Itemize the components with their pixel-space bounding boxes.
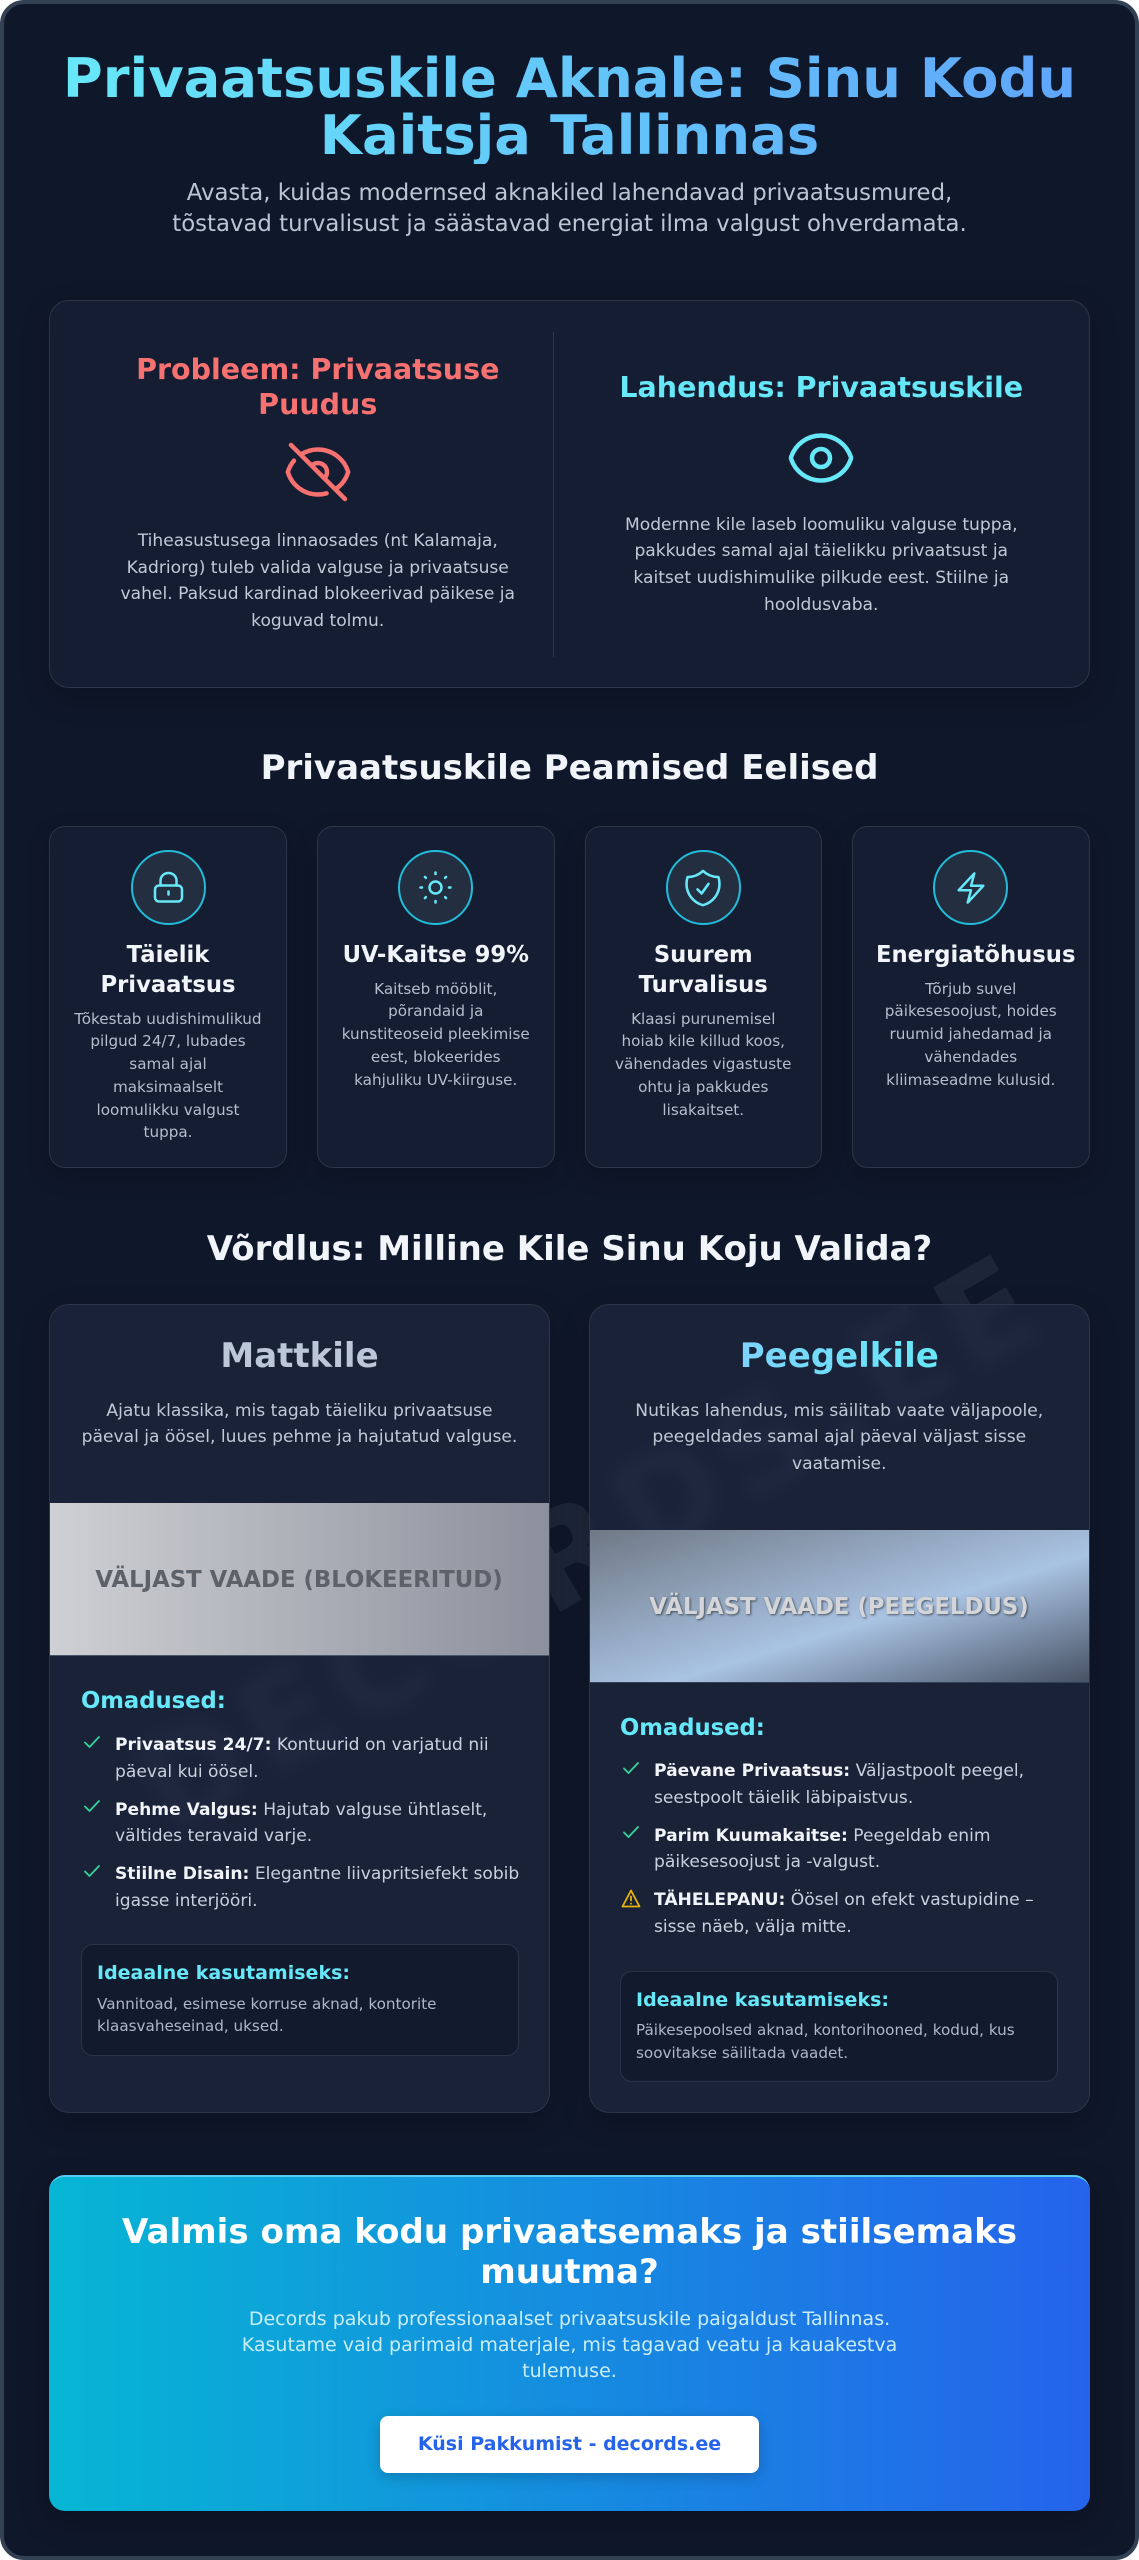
call to action text: Decords pakub professionaalset privaatsuskile paigaldust Tallinnas. (249, 2308, 890, 2330)
icon: eye (788, 433, 854, 483)
card title: safety: Suurem (654, 942, 753, 968)
icon: lightning bolt (933, 850, 1008, 925)
card title: energy: Energiatõhusus (876, 942, 1075, 968)
solution text: pakkudes samal ajal täielikku privaatsust ja (634, 541, 1008, 561)
mirror property 1: seestpoolt täielik läbipaistvus. (654, 1788, 913, 1808)
card text: energy: kliimaseadme kulusid. (886, 1071, 1055, 1089)
card title: UV: UV-Kaitse 99% (343, 942, 529, 968)
benefit card: energy (852, 826, 1090, 1168)
matte view illustration (50, 1503, 548, 1655)
panel: matte film (49, 1304, 550, 2113)
mirror description: vaatamise. (792, 1454, 886, 1474)
card title: safety: Turvalisus (639, 972, 768, 998)
matte property 3: Stiilne Disain: Elegantne liivapritsiefekt sobib (115, 1864, 519, 1884)
solution heading: Lahendus: Privaatsuskile (619, 370, 1023, 404)
mirror property 3: warning: TÄHELEPANU: Öösel on efekt vastupidine – (654, 1890, 1034, 1910)
card text: safety: hoiab kile killud koos, (622, 1032, 785, 1050)
card title: privacy: Täielik (127, 942, 209, 968)
card text: privacy: Tõkestab uudishimulikud (74, 1010, 262, 1028)
mirror property 2: päikesesoojust ja -valgust. (654, 1852, 880, 1872)
title (60, 50, 1080, 164)
matte description: Ajatu klassika, mis tagab täieliku privaatsuse (106, 1400, 493, 1420)
card title: privacy (100, 942, 236, 998)
call to action heading (122, 2212, 1017, 2292)
card text: safety: ohtu ja pakkudes (638, 1078, 768, 1096)
card text: privacy: maksimaalselt (113, 1078, 223, 1096)
benefit card: UV (317, 826, 554, 1168)
mirror description: peegeldades samal ajal päeval väljast sisse (652, 1427, 1026, 1447)
card text: safety: vähendades vigastuste (615, 1055, 791, 1073)
call to action text (242, 2308, 897, 2382)
card text: energy: päikesesoojust, hoides (885, 1002, 1057, 1020)
call to action heading: muutma? (480, 2252, 659, 2292)
matte property 1: päeval kui öösel. (115, 1762, 259, 1782)
solution text: hooldusvaba. (764, 595, 878, 615)
matte ideal use box: Vannitoad, esimese korruse aknad, kontorite (97, 1995, 437, 2013)
benefit card: safety (584, 826, 822, 1168)
problem text: koguvad tolmu. (251, 611, 384, 631)
problem text (121, 531, 515, 631)
title: Privaatsuskile Aknale: Sinu Kodu (63, 47, 1076, 110)
mirror ideal use box: soovitakse säilitada vaadet. (636, 2044, 848, 2062)
matte properties heading: Omadused: (81, 1688, 226, 1714)
card text: UV: kunstiteoseid pleekimise (342, 1025, 530, 1043)
matte property 2: vältides teravaid varje. (115, 1826, 312, 1846)
mirror description (635, 1400, 1043, 1474)
benefit card: privacy (49, 826, 286, 1168)
panel: mirror film (589, 1304, 1090, 2113)
mirror title: Peegelkile (740, 1336, 939, 1376)
matte ideal use box: klaasvaheseinad, uksed. (97, 2017, 284, 2035)
card text: safety: Klaasi purunemisel (631, 1010, 775, 1028)
solution text (625, 514, 1018, 615)
matte property 3: igasse interjööri. (115, 1891, 258, 1911)
matte view illustration: VÄLJAST VAADE (BLOKEERITUD) (95, 1567, 503, 1593)
icon: shield check (666, 850, 741, 925)
card text: UV: Kaitseb mööblit, (374, 980, 497, 998)
card text: energy (885, 980, 1057, 1089)
call to action button (380, 2416, 759, 2473)
problem text: Kadriorg) tuleb valida valguse ja privaatsuse (127, 558, 509, 578)
card text: privacy: pilgud 24/7, lubades (90, 1032, 246, 1050)
call to action button: Küsi Pakkumist - decords.ee (418, 2433, 721, 2455)
mirror ideal use box: Päikesepoolsed aknad, kontorihooned, kodud, kus (636, 2021, 1015, 2039)
card text: safety (615, 1010, 791, 1119)
problem heading: Puudus (258, 388, 377, 421)
card text: energy: ruumid jahedamad ja (889, 1025, 1052, 1043)
matte property 1: Privaatsus 24/7: Kontuurid on varjatud nii (115, 1735, 489, 1755)
heading: comparison: Võrdlus: Milline Kile Sinu Koju Valida? (207, 1229, 932, 1269)
subtitle (172, 180, 967, 236)
call to action banner (49, 2175, 1090, 2511)
card text: privacy (74, 862, 262, 1141)
matte description: päeval ja öösel, luues pehme ja hajutatud valguse. (82, 1427, 517, 1447)
card title: privacy: Privaatsus (100, 972, 236, 998)
mirror properties heading: Omadused: (620, 1715, 765, 1741)
matte property 2 (84, 1800, 487, 1846)
call to action heading: Valmis oma kodu privaatsemaks ja stiilsemaks (122, 2212, 1017, 2252)
problem text: Tiheasustusega linnaosades (nt Kalamaja, (138, 531, 498, 551)
problem heading: Probleem: Privaatsuse (136, 353, 499, 386)
mirror property 2 (623, 1826, 990, 1872)
problem heading (136, 353, 499, 494)
card text: privacy: loomulikku valgust (97, 1101, 239, 1119)
card text: UV (342, 980, 530, 1089)
mirror ideal use box (620, 1971, 1058, 2082)
mirror property 3: warning (622, 1889, 1034, 1937)
card text: UV: kahjuliku UV-kiirguse. (354, 1071, 517, 1089)
card text: energy: vähendades (924, 1048, 1017, 1066)
mirror view illustration (590, 1530, 1088, 1682)
matte description (82, 1400, 517, 1447)
watermark: DECORDS.EE (110, 1222, 1070, 1864)
card text: UV: põrandaid ja (388, 1002, 483, 1020)
matte property 3 (84, 1864, 519, 1911)
heading: benefits: Privaatsuskile Peamised Eelised (261, 748, 878, 788)
mirror property 2: Parim Kuumakaitse: Peegeldab enim (654, 1826, 990, 1846)
mirror view illustration: VÄLJAST VAADE (PEEGELDUS) (649, 1594, 1029, 1620)
matte property 2: Pehme Valgus: Hajutab valguse ühtlaselt, (115, 1800, 487, 1820)
call to action text: tulemuse. (522, 2360, 617, 2382)
matte ideal use box (81, 1944, 519, 2056)
card title: safety (638, 942, 768, 998)
card text: privacy: samal ajal (129, 1055, 207, 1073)
icon: eye crossed out (286, 442, 350, 502)
solution text: kaitset uudishimulike pilkude eest. Stiilne ja (633, 568, 1009, 588)
problem text: vahel. Paksud kardinad blokeerivad päikese ja (121, 584, 515, 604)
subtitle: tõstavad turvalisust ja säästavad energiat ilma valgust ohverdamata. (172, 210, 967, 236)
card text: energy: Tõrjub suvel (925, 980, 1016, 998)
subtitle: Avasta, kuidas modernsed aknakiled lahendavad privaatsusmured, (187, 180, 952, 206)
card text: safety: lisakaitset. (662, 1101, 744, 1119)
mirror property 1 (623, 1761, 1024, 1808)
mirror property 1: Päevane Privaatsus: Väljastpoolt peegel, (654, 1761, 1024, 1781)
mirror property 3: warning: sisse näeb, välja mitte. (654, 1917, 852, 1937)
solution text: Modernne kile laseb loomuliku valguse tuppa, (625, 514, 1018, 534)
title: Kaitsja Tallinnas (320, 104, 819, 167)
matte ideal use box: Ideaalne kasutamiseks: (97, 1962, 350, 1984)
matte title: Mattkile (220, 1336, 379, 1376)
card text: UV: eest, blokeerides (371, 1048, 501, 1066)
mirror description: Nutikas lahendus, mis säilitab vaate väljapoole, (635, 1400, 1043, 1420)
card text: privacy: tuppa. (144, 1123, 192, 1141)
icon: lock (130, 850, 206, 925)
matte property 1 (84, 1735, 489, 1782)
call to action text: Kasutame vaid parimaid materjale, mis tagavad veatu ja kauakestva (242, 2334, 897, 2356)
icon: sun (398, 850, 473, 925)
mirror ideal use box: Ideaalne kasutamiseks: (636, 1989, 889, 2011)
panel: problem and solution (49, 300, 1090, 688)
